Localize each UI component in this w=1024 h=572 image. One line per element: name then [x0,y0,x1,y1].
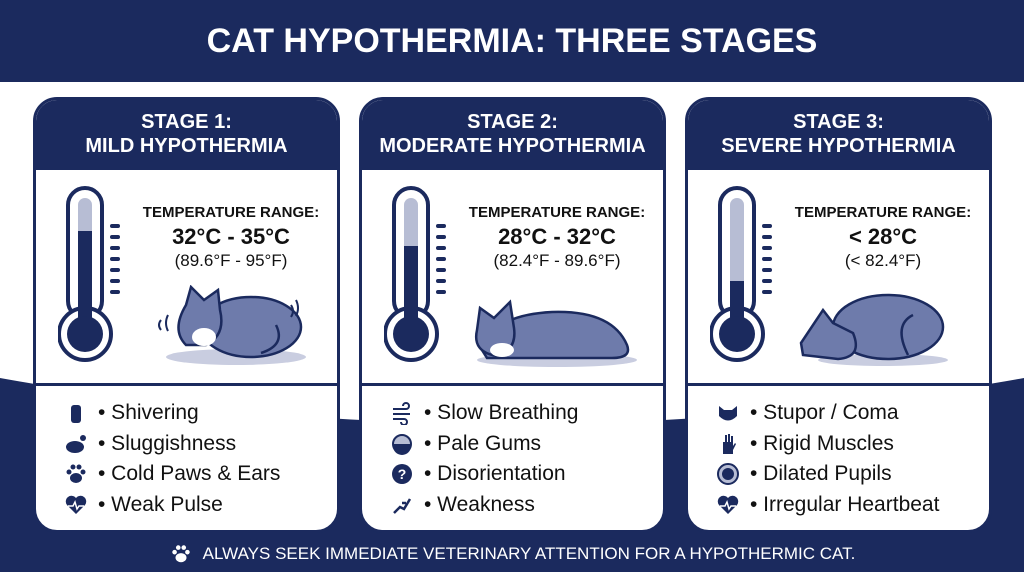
icon: shivering cat [158,285,306,365]
temperature range 3: TEMPERATURE RANGE: [795,204,971,221]
symptoms list 1: • Cold Paws & Ears [98,462,280,485]
heading: stage 1 [36,100,337,170]
symptoms list 2: • Slow Breathing [424,401,578,424]
icon: paw [172,545,190,562]
temperature range 3: (< 82.4°F) [845,251,921,270]
symptoms list 2 [392,401,578,516]
symptoms list 1: • Weak Pulse [98,492,223,516]
heading: stage 3: SEVERE HYPOTHERMIA [721,135,956,157]
temperature range 3 [794,204,971,270]
temperature range 1: 32°C - 35°C [172,224,290,249]
symptoms list 1 [66,401,280,516]
title bar: CAT HYPOTHERMIA: THREE STAGES [207,22,817,60]
panel: stage 2 [359,97,666,533]
temperature range 1: TEMPERATURE RANGE: [143,204,319,221]
symptoms list 1: • Sluggishness [98,432,236,454]
icon: thermometer 2 [384,186,446,362]
heading: stage 2 [362,100,663,170]
symptoms list 3: • Rigid Muscles [750,432,894,454]
heading: stage 2: MODERATE HYPOTHERMIA [379,135,646,157]
footer note: ALWAYS SEEK IMMEDIATE VETERINARY ATTENTION FOR A HYPOTHERMIC CAT. [203,544,855,563]
symptoms list 1: • Shivering [98,401,199,424]
temperature range 2: 28°C - 32°C [498,224,616,249]
icon: thermometer 3 [710,186,772,362]
icon: lying cat [474,300,637,367]
symptoms list 3 [717,401,940,516]
symptoms list 2: • Pale Gums [424,432,541,454]
title bar [0,0,1024,82]
symptoms list 2: ? [398,466,406,482]
temperature range 2: TEMPERATURE RANGE: [469,204,645,221]
heading: stage 2: STAGE 2: [467,111,558,133]
temperature range 2: (82.4°F - 89.6°F) [494,251,620,270]
temperature range 1: (89.6°F - 95°F) [175,251,287,270]
heading: stage 1: STAGE 1: [141,111,232,133]
symptoms list 2: • Disorientation [424,462,566,485]
panel: stage 1 [33,97,340,533]
temperature range 3: < 28°C [849,224,917,249]
symptoms list 3: • Stupor / Coma [750,401,899,424]
symptoms list 3: • Dilated Pupils [750,462,892,485]
symptoms list 3: • Irregular Heartbeat [750,492,939,516]
temperature range 2 [468,204,645,270]
symptoms list 2: • Weakness [424,492,535,516]
temperature range 1 [142,204,319,270]
heading: stage 3: STAGE 3: [793,111,884,133]
icon: thermometer 1 [58,186,120,362]
panel: stage 3 [685,97,992,533]
icon: curled cat [800,294,948,366]
heading: stage 1: MILD HYPOTHERMIA [85,135,288,157]
heading: stage 3 [688,100,989,170]
